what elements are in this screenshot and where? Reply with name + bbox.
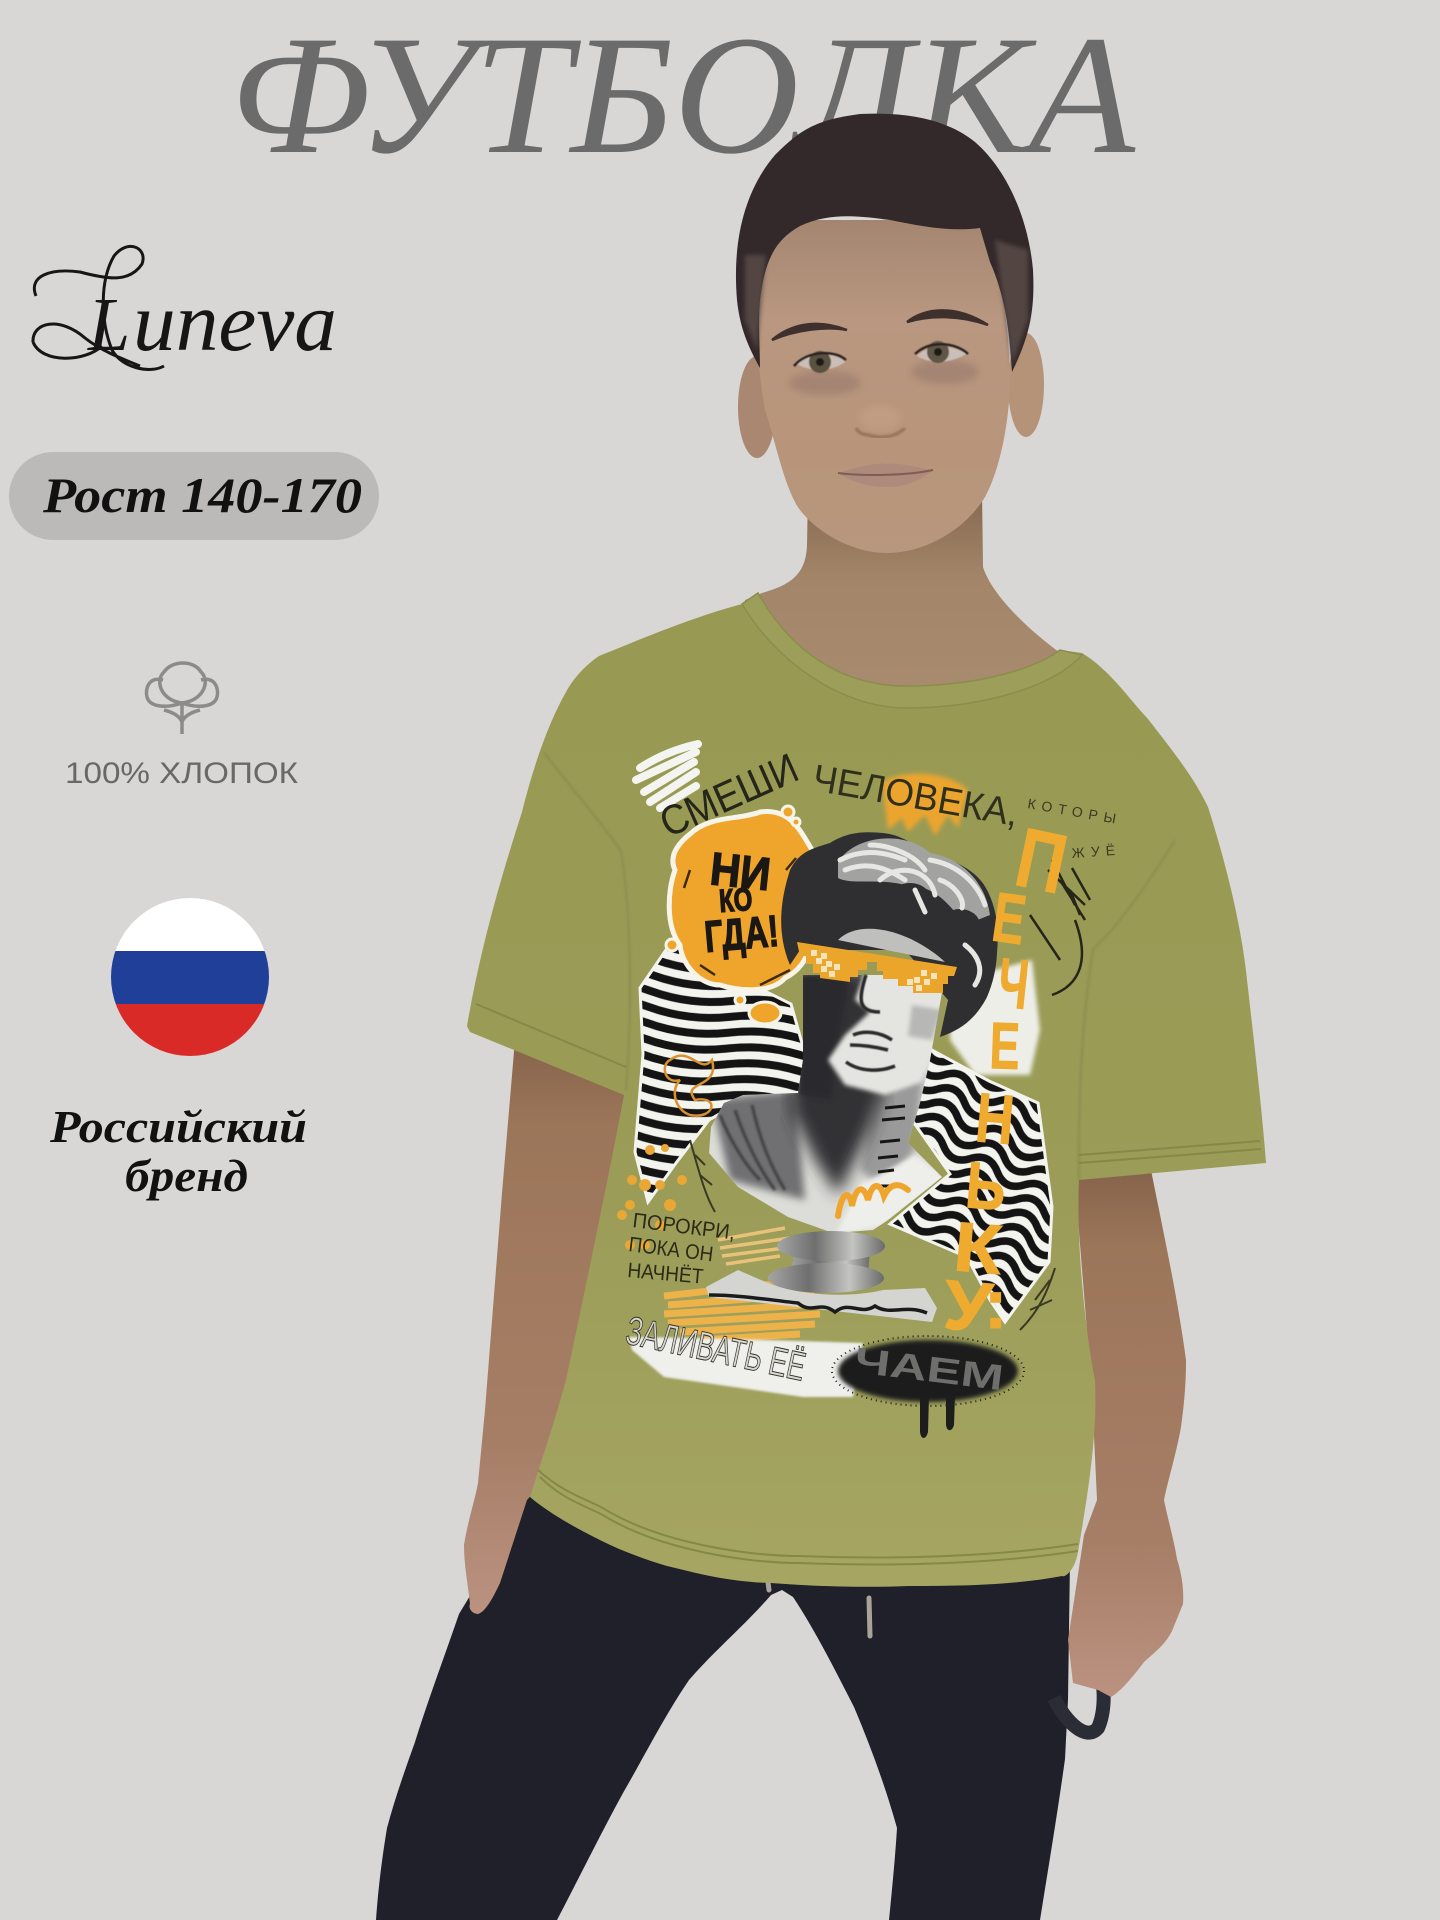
vertical headline: печеньку: : (984, 1265, 1007, 1343)
orange flower doodle (665, 1056, 713, 1116)
small text: который жуёт: ЖУЁ (1071, 842, 1122, 861)
small text: пророк: НАЧНЁТ (627, 1259, 704, 1289)
icon: russian flag (111, 898, 269, 1056)
collar (742, 593, 1082, 708)
bubble lettering: КО (718, 881, 753, 919)
hair curls (840, 845, 985, 985)
pedestal (768, 1231, 885, 1293)
small text: пророк: ПОРОКРИ, (631, 1209, 736, 1245)
right eye (915, 341, 968, 363)
twig doodles (690, 1140, 1055, 1330)
white brush strip (629, 1337, 863, 1397)
under-eye shading (789, 360, 979, 395)
cotton label: 100% ХЛОПОК (65, 757, 299, 790)
vertical headline: печеньку: Ь (963, 1147, 1009, 1224)
sunglasses pixel dots (811, 950, 937, 991)
vertical headline: печеньку: Е (988, 878, 1030, 959)
right eyebrow (907, 310, 988, 325)
face lines (846, 975, 895, 1070)
belt strap (1054, 1649, 1104, 1733)
bubble specks (684, 858, 796, 985)
white scribble (636, 744, 698, 808)
brand logo: Luneva (33, 246, 337, 369)
t-shirt print (617, 744, 1123, 1438)
icon: cotton boll (146, 663, 218, 734)
orange dots (617, 1144, 687, 1250)
dark curl hollows (890, 883, 980, 941)
height pill: Рост 140-170 (42, 467, 362, 523)
orange squiggle (838, 1185, 908, 1216)
wavy stripes: left (635, 944, 805, 1202)
hair (736, 114, 1033, 372)
headline: смеши: СМЕШИ (653, 744, 805, 846)
title: ФУТБОЛКА (230, 1, 1136, 189)
boy: head (736, 114, 1044, 553)
bubble lettering: ГДА! (703, 907, 781, 962)
right ear (1008, 333, 1044, 437)
left ear (738, 356, 776, 458)
vertical headline: печеньку: П (1008, 810, 1075, 912)
headline: человека: ЧЕЛОВЕКА, (809, 758, 1022, 835)
speech bubble (666, 806, 817, 1024)
boy: t-shirt (467, 593, 1266, 1587)
drawstring tips (768, 1582, 870, 1636)
neck lines (875, 1106, 905, 1186)
slogan: заливать её: ЗАЛИВАТЬ ЕЁ (622, 1309, 809, 1390)
wavy stripes: right (890, 1048, 1052, 1322)
face (757, 220, 1010, 553)
hair side fade (745, 240, 1028, 365)
hair (781, 832, 998, 1037)
pedestal base (706, 1270, 937, 1322)
vertical headline: печеньку: У (941, 1265, 997, 1347)
left eyebrow (772, 324, 847, 340)
small text: который жуёт (1026, 795, 1123, 861)
white spray right of head (950, 960, 1040, 1075)
boy: neck (745, 490, 1070, 745)
boy: right arm (1068, 1170, 1186, 1697)
sunglasses (797, 942, 957, 993)
hem and cuff stitches (476, 1004, 1261, 1564)
small text: пророк (627, 1209, 736, 1289)
light curls block (838, 838, 990, 925)
vertical headline: печеньку (941, 810, 1075, 1347)
vertical headline: печеньку: Ч (994, 943, 1032, 1024)
pale upper scribbles (718, 1228, 790, 1264)
brand logo: Luneva: uneva (133, 276, 337, 369)
left eye (794, 351, 846, 373)
boy: jeans (376, 1490, 1104, 1920)
vertical headline: печеньку: Н (973, 1078, 1017, 1159)
vertical headline: печеньку: К (951, 1207, 1006, 1289)
orange spray behind headline (882, 774, 968, 836)
small text: пророк: ПОКА ОН (627, 1233, 715, 1266)
base squiggle (709, 1295, 927, 1313)
boy: left arm (464, 1040, 640, 1614)
bust body clipped (709, 975, 942, 1232)
russian brand label (49, 1102, 307, 1201)
shirt body (467, 593, 1266, 1587)
word: чаем: ЧАЕМ (852, 1339, 1006, 1398)
russian brand label: бренд (125, 1151, 248, 1201)
forehead wedge (838, 929, 945, 962)
sleeve seams (544, 752, 1175, 1180)
bust (700, 832, 998, 1240)
brand logo: Luneva: L (87, 283, 130, 367)
mouth (838, 463, 933, 487)
doodle lines (1030, 860, 1090, 995)
cheek shading (908, 1005, 942, 1040)
bubble lettering (703, 842, 781, 962)
height pill (9, 452, 379, 540)
bubble small dots (666, 806, 800, 1024)
orange scribbles at base (664, 1282, 820, 1340)
russian brand label: Российский (49, 1102, 307, 1152)
black spray blot (832, 1336, 1024, 1438)
vertical headline: печеньку: Е (989, 1008, 1021, 1083)
bubble lettering: НИ (708, 842, 773, 900)
small text: который жуёт: КОТОРЫ (1026, 795, 1123, 828)
nose (856, 406, 905, 437)
